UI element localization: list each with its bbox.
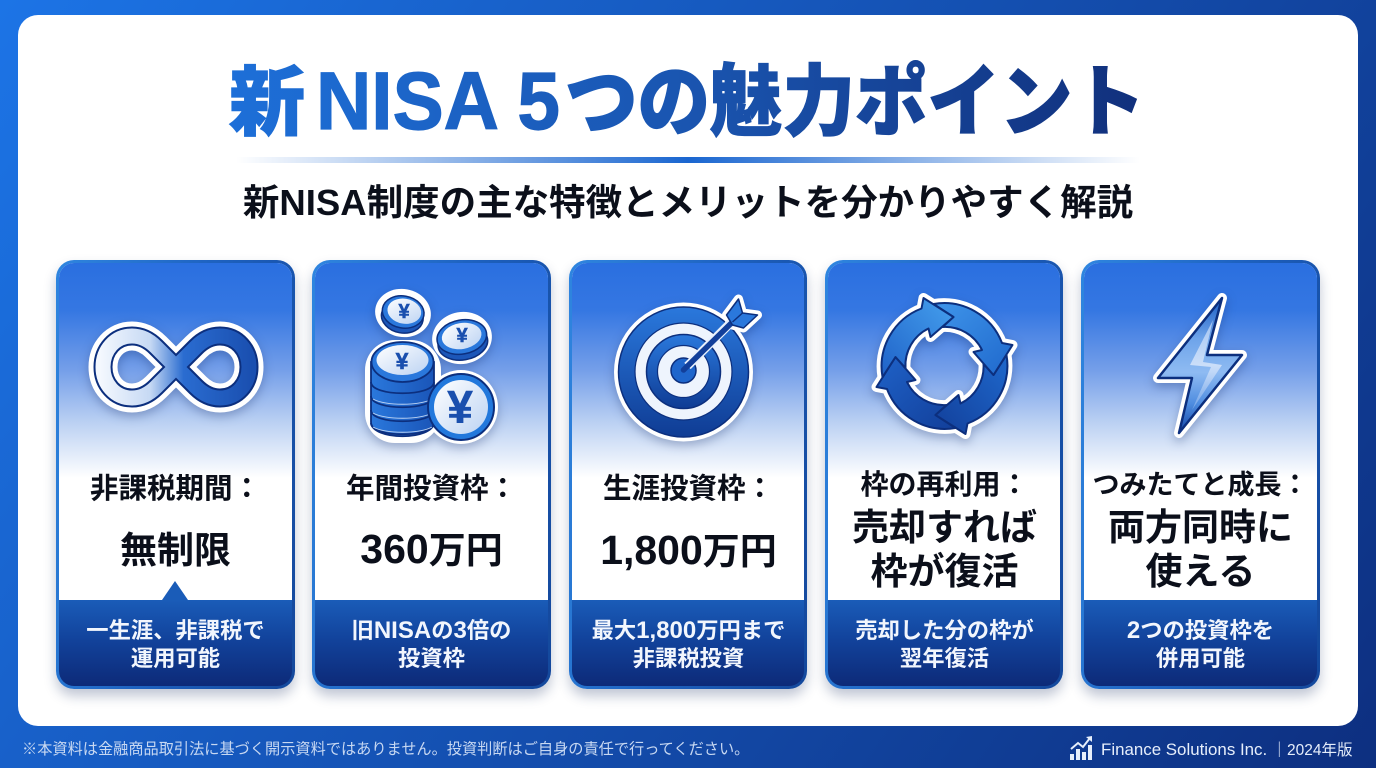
footer band: [828, 600, 1060, 686]
footer band: [315, 600, 548, 686]
description: 運用可能: [131, 646, 220, 671]
yen signs: ¥: [396, 348, 409, 374]
icon: infinity: [84, 322, 268, 421]
white backing: [371, 285, 435, 341]
description: [86, 618, 265, 671]
heading: 非課税期間：: [90, 473, 261, 505]
panel: limit reuse: [825, 260, 1063, 689]
icon: target: [610, 294, 764, 450]
icon: chart logo: [1070, 736, 1092, 760]
arrow: [726, 299, 758, 328]
title: [228, 56, 1145, 147]
title: つの魅力ポイント: [565, 58, 1145, 146]
disclaimer: ※本資料は金融商品取引法に基づく開示資料ではありません。投資判断はご自身の責任で行ってください。: [22, 741, 749, 758]
title: NISA 5: [316, 56, 560, 147]
company credit: Finance Solutions Inc. ｜2024年版: [1101, 740, 1352, 759]
footer band: [572, 600, 804, 686]
value: 360万円: [360, 526, 503, 572]
description: [352, 617, 511, 671]
small coins: [379, 293, 490, 364]
value: [852, 507, 1037, 592]
value: 1,800万円: [600, 527, 777, 573]
icon: yen coins: [360, 288, 502, 453]
description: 投資枠: [398, 646, 465, 671]
description: [592, 617, 785, 671]
heading: つみたてと成長：: [1092, 470, 1308, 500]
heading: 枠の再利用：: [860, 469, 1028, 500]
value: 枠が復活: [870, 551, 1018, 592]
footer band: [59, 600, 292, 686]
description: 翌年復活: [900, 646, 989, 671]
band pointer: [162, 581, 188, 600]
yen signs: ¥: [447, 381, 473, 433]
big coin: [428, 374, 494, 440]
description: 非課税投資: [633, 646, 744, 671]
subtitle: 新NISA制度の主な特徴とメリットを分かりやすく解説: [243, 182, 1133, 223]
title underline: [236, 157, 1140, 163]
heading: 生涯投資枠：: [603, 473, 774, 505]
icon: cycle arrows: [869, 293, 1020, 446]
stack: [371, 342, 434, 436]
value: 売却すれば: [852, 507, 1037, 548]
description: 売却した分の枠が: [855, 618, 1034, 643]
description: [1127, 617, 1274, 671]
description: 最大1,800万円まで: [592, 617, 785, 644]
panel: tax-free period: [56, 260, 295, 689]
yen signs: [396, 301, 473, 433]
footer band: [1084, 600, 1317, 686]
value: 無制限: [120, 530, 231, 571]
yen signs: ¥: [456, 325, 468, 347]
description: 2つの投資枠を: [1127, 617, 1274, 644]
panel: combined use: [1081, 260, 1320, 689]
heading: 年間投資枠：: [346, 473, 517, 505]
description: 旧NISAの3倍の: [352, 617, 511, 644]
panel: lifetime limit: [569, 260, 807, 689]
description: 併用可能: [1156, 646, 1245, 671]
yen signs: ¥: [398, 301, 410, 323]
panel: annual limit: [312, 260, 551, 689]
description: 一生涯、非課税で: [86, 618, 265, 643]
value: 使える: [1146, 551, 1255, 592]
icon: lightning: [1150, 293, 1249, 446]
title: 新: [229, 61, 305, 146]
value: [1108, 507, 1293, 592]
description: [855, 618, 1034, 671]
value: 両方同時に: [1108, 507, 1293, 548]
